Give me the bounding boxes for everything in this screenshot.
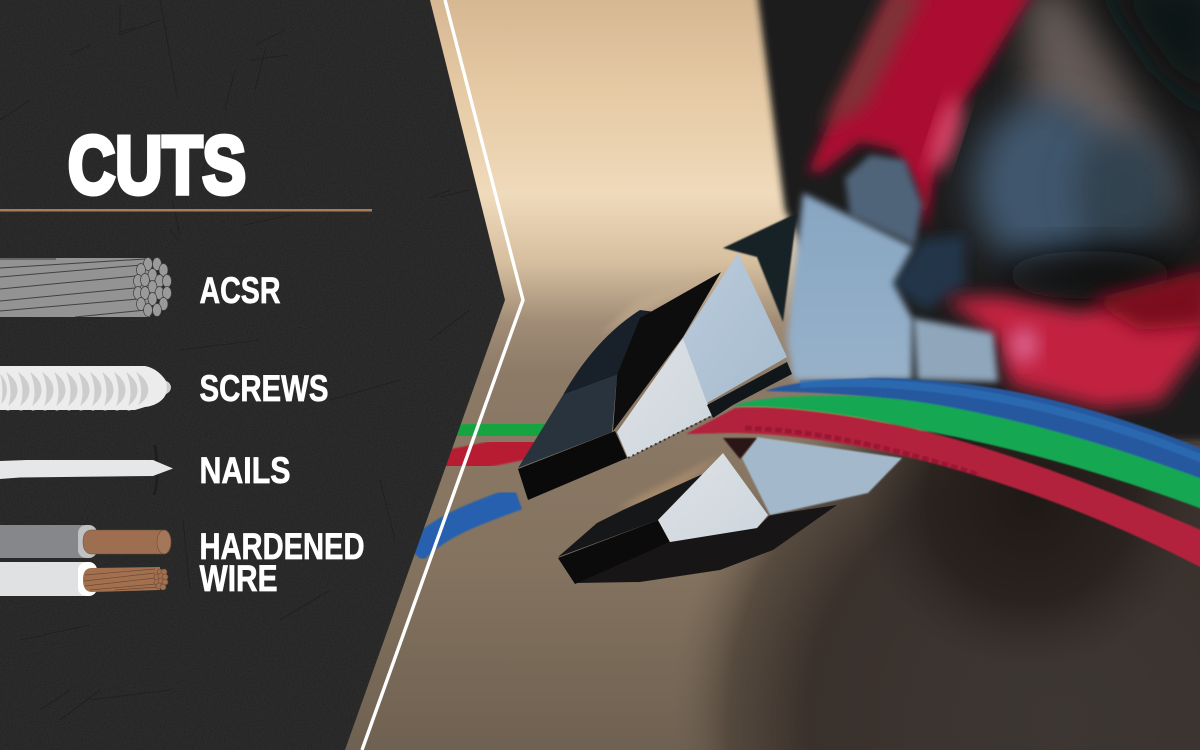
- label: HARDENED WIRE: WIRE: [200, 558, 278, 599]
- item: HARDENED WIRE: [0, 525, 364, 599]
- right wires: [686, 378, 1200, 572]
- pliers lower jaw: [558, 437, 902, 584]
- divider line: [0, 209, 372, 212]
- label: SCREWS: SCREWS: [200, 368, 328, 409]
- title: CUTS: CUTS: [68, 120, 246, 211]
- icon: wires: [0, 525, 171, 596]
- photo: pliers cutting coloured wires: [345, 0, 1200, 750]
- label: HARDENED WIRE: HARDENED: [200, 526, 364, 567]
- icon: screw: [0, 366, 171, 410]
- white chevron outline: [362, 0, 523, 750]
- label: ACSR: ACSR: [200, 270, 280, 311]
- pliers upper jaw: [518, 155, 998, 500]
- icon: nail: [0, 460, 173, 479]
- blurred background right: [670, 0, 1200, 750]
- item: SCREWS: [0, 366, 328, 410]
- item: NAILS: [0, 450, 290, 491]
- dark chevron panel: [0, 0, 510, 750]
- icon: ACSR cable: [0, 258, 172, 317]
- blurred red handles: [808, 0, 1200, 408]
- label: HARDENED WIRE: [200, 526, 364, 599]
- label: NAILS: NAILS: [200, 450, 290, 491]
- left wires: [414, 425, 552, 553]
- item: ACSR: [0, 258, 280, 317]
